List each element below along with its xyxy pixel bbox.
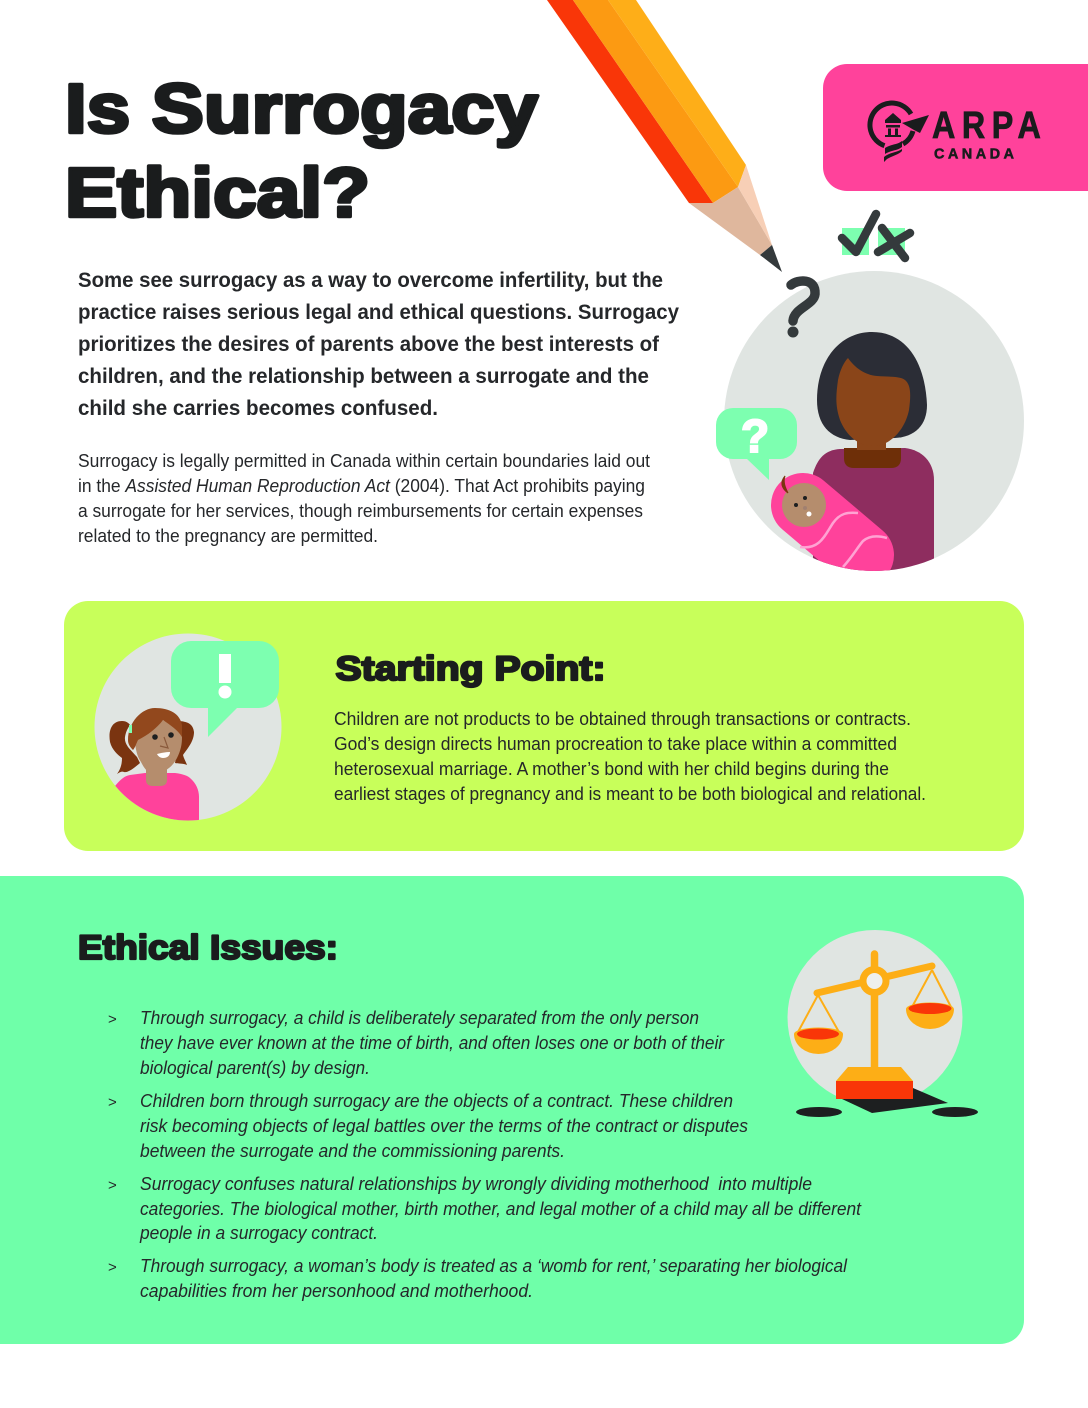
- illustration: girl with exclamation bubble: [94, 634, 282, 825]
- issue 3: categories. The biological mother, birth mother, and legal mother of a child may all be different: [140, 1199, 862, 1219]
- body paragraph: Surrogacy is legally permitted in Canada within certain boundaries laid out: [78, 451, 650, 471]
- issue 2: [108, 1091, 748, 1161]
- issue 4: [108, 1256, 848, 1301]
- issue 4: capabilities from her personhood and motherhood.: [140, 1281, 533, 1301]
- issue 2: risk becoming objects of legal battles over the terms of the contract or disputes: [140, 1116, 748, 1136]
- illustration: mother and baby: [716, 271, 1024, 571]
- issue 2: >: [108, 1094, 117, 1111]
- icon: question mark: [788, 281, 815, 338]
- heading: ethical issues: Ethical Issues:: [78, 929, 338, 967]
- intro paragraph: prioritizes the desires of parents above the best interests of: [78, 332, 660, 356]
- body paragraph: [78, 451, 650, 546]
- speech bubble: question: ?: [741, 410, 769, 462]
- issue 2: between the surrogate and the commissioning parents.: [140, 1141, 565, 1161]
- title: Is Surrogacy: [65, 70, 538, 148]
- issue 4: >: [108, 1259, 117, 1276]
- title: [65, 70, 538, 232]
- issue 1: they have ever known at the time of birth, and often loses one or both of their: [140, 1033, 725, 1053]
- issue 3: [108, 1174, 862, 1243]
- body paragraph: in the Assisted Human Reproduction Act (2004). That Act prohibits paying: [78, 476, 645, 496]
- title: Ethical?: [65, 154, 370, 232]
- baby in swaddle: [782, 483, 887, 567]
- starting point text: [334, 709, 926, 804]
- intro paragraph: Some see surrogacy as a way to overcome infertility, but the: [78, 268, 663, 292]
- issue 2: Children born through surrogacy are the objects of a contract. These children: [140, 1091, 733, 1111]
- issue 1: [108, 1008, 725, 1078]
- logo wordmark: ARPA: [932, 105, 1041, 147]
- intro paragraph: children, and the relationship between a surrogate and the: [78, 364, 649, 388]
- intro paragraph: practice raises serious legal and ethical questions. Surrogacy: [78, 300, 679, 324]
- starting point text: God’s design directs human procreation to take place within a committed: [334, 734, 897, 754]
- intro paragraph: child she carries becomes confused.: [78, 396, 438, 420]
- heading: starting point: Starting Point:: [336, 650, 606, 688]
- body paragraph: related to the pregnancy are permitted.: [78, 526, 378, 546]
- starting point text: heterosexual marriage. A mother’s bond with her child begins during the: [334, 759, 889, 779]
- speech bubble: exclamation: [171, 641, 279, 737]
- body paragraph: a surrogate for her services, though reimbursements for certain expenses: [78, 501, 643, 521]
- panel: ethical issues: [0, 876, 1024, 1344]
- issue 1: >: [108, 1011, 117, 1028]
- icon: pencil: [547, 0, 782, 272]
- starting point text: earliest stages of pregnancy and is meant to be both biological and relational.: [334, 784, 926, 804]
- issue 1: Through surrogacy, a child is deliberately separated from the only person: [140, 1008, 699, 1028]
- issue 4: Through surrogacy, a woman’s body is treated as a ‘womb for rent,’ separating her biological: [140, 1256, 848, 1276]
- panel: starting point: [64, 601, 1024, 851]
- issue 3: >: [108, 1177, 117, 1194]
- intro paragraph: [78, 268, 679, 420]
- issue 1: biological parent(s) by design.: [140, 1058, 370, 1078]
- issue 3: Surrogacy confuses natural relationships by wrongly dividing motherhood into multiple: [140, 1174, 812, 1194]
- mother figure: [813, 332, 934, 571]
- icon: balance scale: [788, 930, 978, 1117]
- speech bubble: question: [716, 408, 797, 480]
- icon: check and cross boxes: [842, 214, 910, 258]
- starting point text: Children are not products to be obtained through transactions or contracts.: [334, 709, 911, 729]
- icon: lighthouse logo: [870, 103, 929, 162]
- logo wordmark: CANADA: [934, 146, 1015, 162]
- girl figure: [110, 708, 199, 820]
- logo panel: [823, 64, 1088, 191]
- issue 3: people in a surrogacy contract.: [139, 1223, 378, 1243]
